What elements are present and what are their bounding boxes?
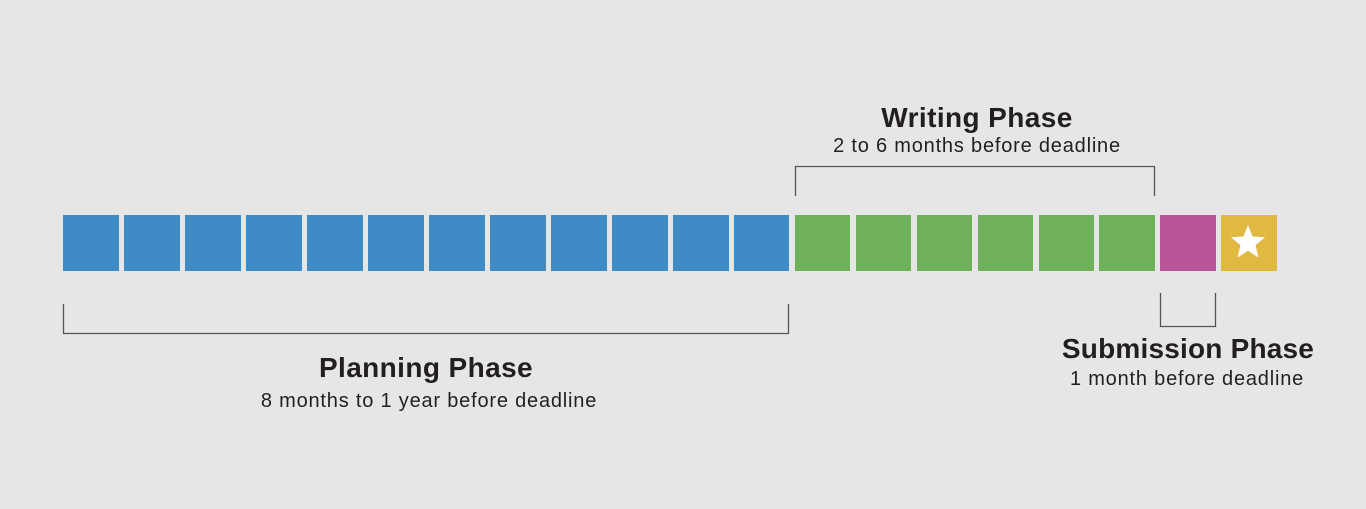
heading: planning phase	[261, 352, 597, 412]
heading: submission phase: Submission Phase	[1062, 333, 1314, 364]
writing blocks	[795, 215, 1155, 271]
heading: planning phase: 8 months to 1 year before deadline	[261, 390, 597, 412]
heading: submission phase: 1 month before deadline	[1070, 368, 1304, 390]
submission block	[1160, 215, 1216, 271]
icon: star deadline	[1221, 215, 1277, 271]
planning blocks	[63, 215, 789, 271]
timeline squares	[63, 215, 1277, 271]
heading: writing phase	[833, 102, 1121, 157]
bracket: submission	[1160, 293, 1216, 326]
heading: writing phase: 2 to 6 months before deadline	[833, 135, 1121, 157]
heading: writing phase: Writing Phase	[881, 102, 1073, 133]
heading: submission phase	[1062, 333, 1314, 390]
heading: planning phase: Planning Phase	[319, 352, 533, 383]
bracket: planning	[64, 304, 788, 334]
bracket: writing	[796, 166, 1154, 196]
